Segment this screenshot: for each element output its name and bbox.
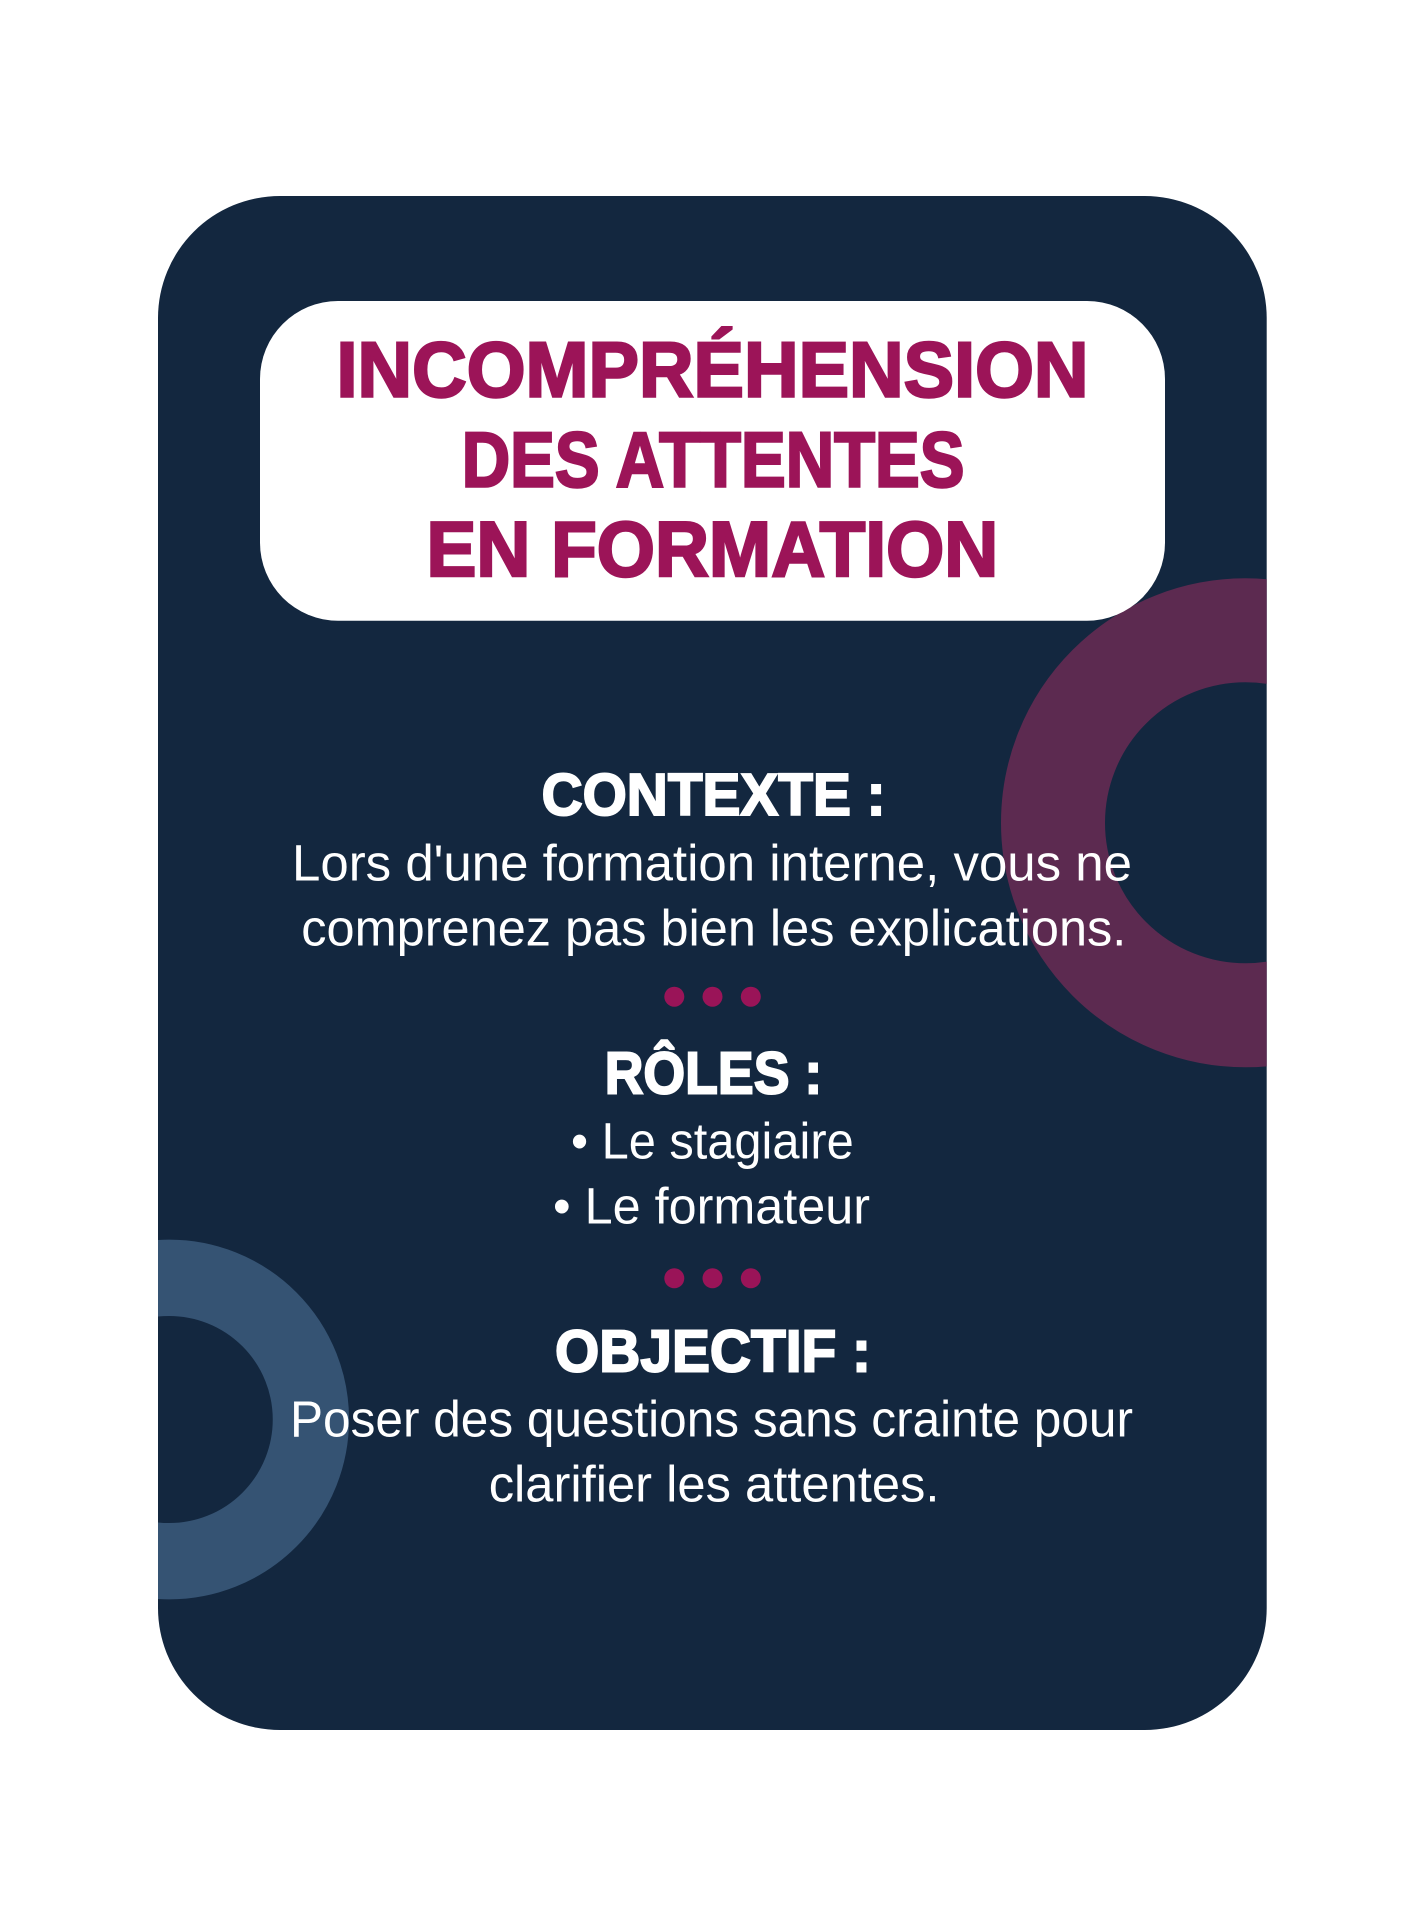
heading: contexte: CONTEXTE :: [542, 762, 886, 828]
text: contexte line 1: Lors d'une formation interne, vous ne: [292, 835, 1132, 892]
section: rôles: [553, 1039, 870, 1234]
infographic card: [158, 196, 1267, 1730]
title line 2: DES ATTENTES: [462, 416, 964, 504]
section: objectif: [290, 1319, 1133, 1513]
ring: maroon: [1053, 630, 1425, 1015]
heading: objectif: OBJECTIF :: [555, 1319, 871, 1385]
panel: title box: [260, 301, 1165, 621]
separator dots 2: [664, 1268, 761, 1288]
title line 3: EN FORMATION: [426, 505, 998, 593]
decorative rings: [158, 578, 1267, 1600]
text: role 1: • Le stagiaire: [571, 1112, 854, 1169]
text: contexte line 2: comprenez pas bien les explications.: [301, 900, 1126, 957]
title background: [260, 301, 1165, 621]
section: contexte: [292, 762, 1132, 957]
text: role 2: • Le formateur: [553, 1177, 870, 1234]
text: objectif line 2: clarifier les attentes.: [489, 1456, 940, 1513]
heading: rôles: RÔLES :: [605, 1039, 822, 1106]
title line 1: INCOMPRÉHENSION: [336, 326, 1088, 414]
separator dots 1: [664, 987, 761, 1007]
panel: card background: [158, 196, 1267, 1730]
text: objectif line 1: Poser des questions sans crainte pour: [290, 1391, 1133, 1448]
ring: blue: [158, 1240, 349, 1600]
